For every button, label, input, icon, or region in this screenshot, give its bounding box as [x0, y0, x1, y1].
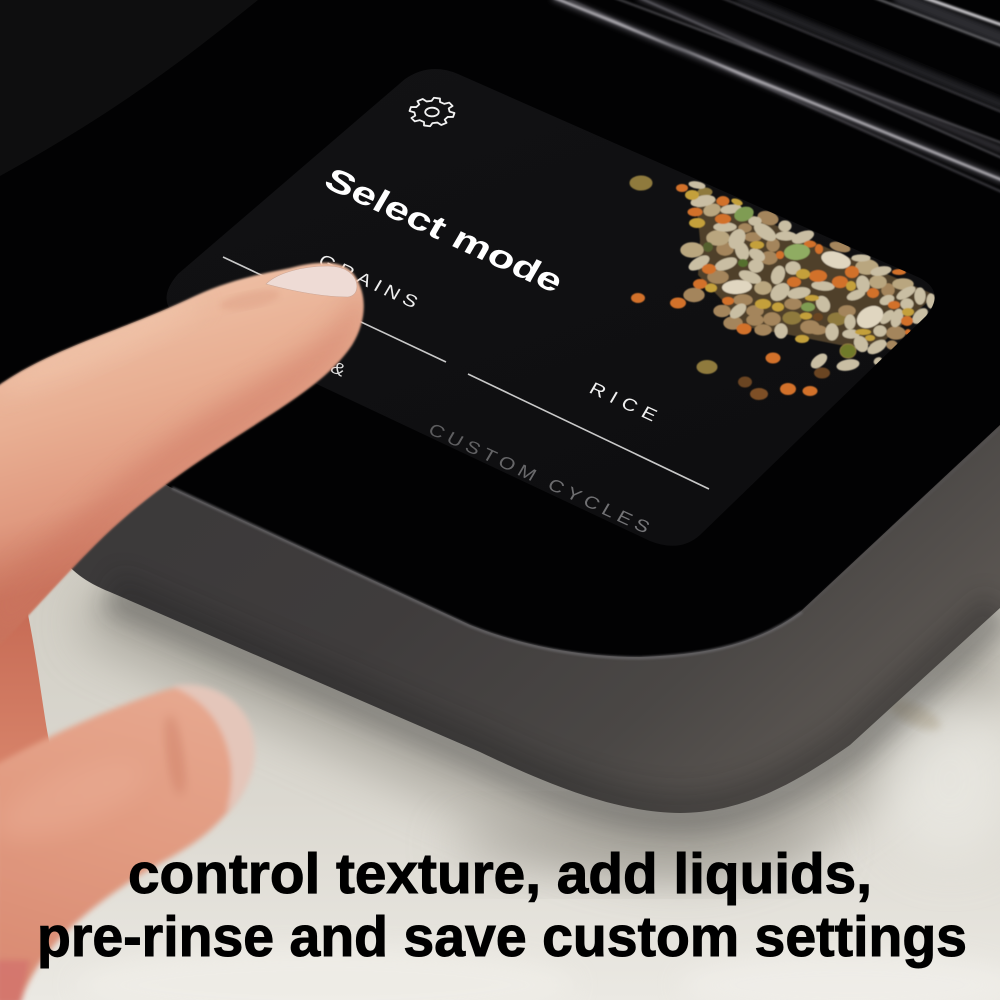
upper left lid corner: [0, 0, 258, 176]
panel: touchscreen menu: [167, 69, 935, 546]
hand: thumb: [0, 685, 255, 1000]
glass lid reflections: [555, 0, 1000, 192]
caption line 2: pre-rinse and save custom settings: [37, 905, 967, 969]
hand: palm between fingers: [0, 600, 50, 790]
black glass display surface: [0, 0, 1000, 658]
appliance base: [60, 380, 1000, 813]
icon: thumbnail: [172, 685, 255, 812]
grains image: [630, 176, 935, 400]
divider: rice: [468, 374, 709, 489]
label: RICE: RICE: [586, 379, 660, 426]
hand: index finger: [0, 263, 364, 645]
label: GRAINS: GRAINS: [315, 251, 421, 312]
divider: grains: [223, 257, 446, 362]
icon: index fingernail: [266, 266, 357, 297]
icon: settings gear: [405, 95, 459, 129]
label: CUSTOM CYCLES: CUSTOM CYCLES: [425, 420, 653, 538]
label: ampersand: &: [327, 358, 350, 381]
caption line 1: control texture, add liquids,: [128, 842, 872, 906]
heading: Select mode: Select mode: [318, 160, 570, 300]
